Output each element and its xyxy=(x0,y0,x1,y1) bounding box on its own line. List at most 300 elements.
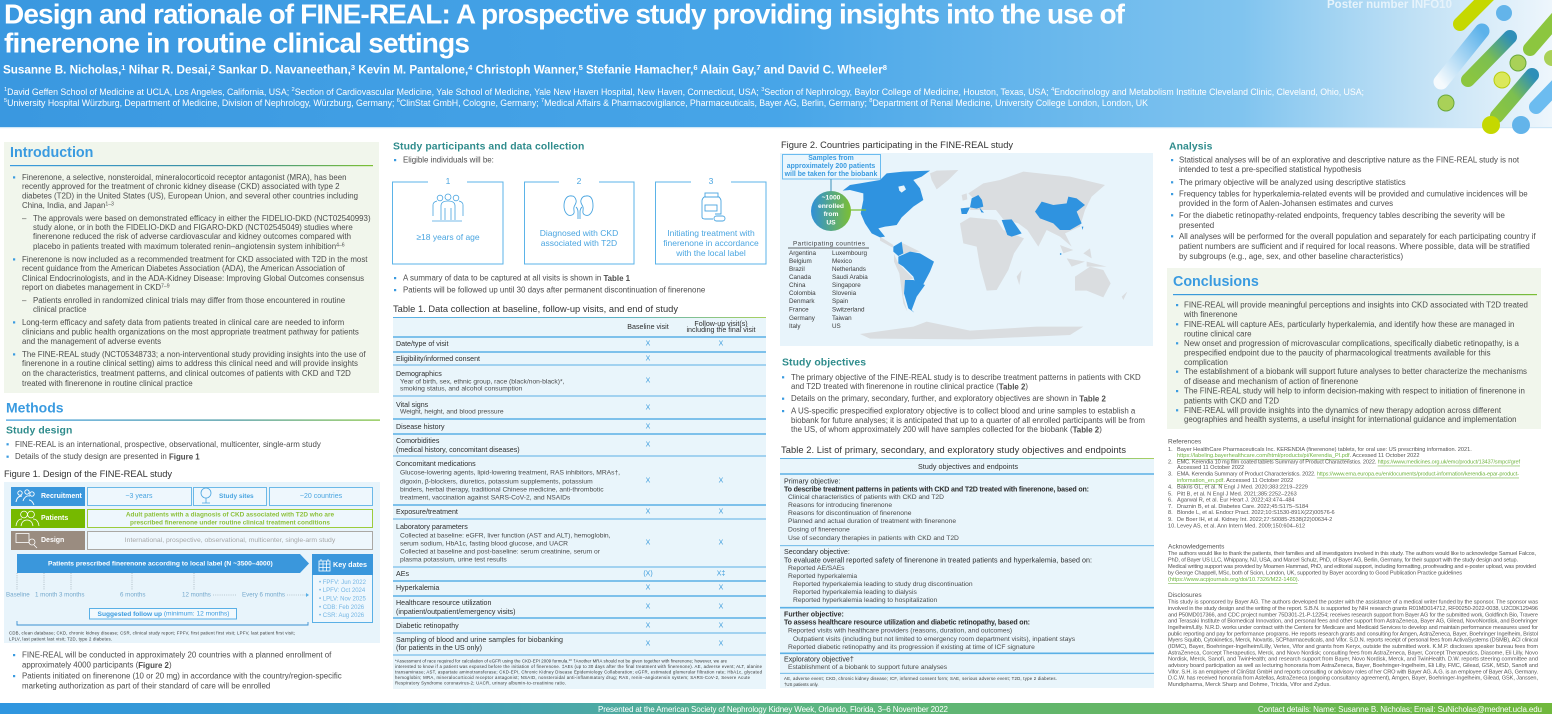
data collection bullets: A summary of data to be captured at all visits is shown in Table 1 xyxy=(403,274,631,282)
bullets below figure 1: FINE-REAL will be conducted in approximately 20 countries with a planned enrollment of xyxy=(22,650,332,660)
panel: introduction xyxy=(4,142,379,393)
table 1 header xyxy=(627,320,756,334)
eligibility box 1: age: ≥18 years of age xyxy=(416,232,480,242)
acknowledgements: The authors would like to thank the patients, their families and all investigators involved in this study. The authors would like to acknowledge Samuel Falcos, xyxy=(1168,551,1536,557)
authors: Susanne B. Nicholas,1 Nihar R. Desai,2 Sankar D. Navaneethan,3 Kevin M. Pantalone,4 Christoph Wanner,5 Stefanie Hamacher,6 Alain Gay,7 and David C. Wheeler8 xyxy=(3,63,887,76)
references: EMC. Kerendia 10 mg film coated tablets Summary of Product Characteristics. 2022. https://www.medicines.org.uk/emc/product/13437/smpc#gref xyxy=(1177,460,1520,466)
analysis bullets: For the diabetic retinopathy-related endpoints, frequency tables describing the severity will be xyxy=(1179,211,1506,220)
header decoration: capsules and circles xyxy=(1438,0,1552,134)
disclosures: and P50MD017366, and CDC project number 75D301-21-P-12254; receives research support from Bayer AG for the submitted work, Goldfinch Bio, Travere xyxy=(1168,612,1538,618)
eligibility box 2: CKD: Diagnosed with CKD xyxy=(540,228,618,238)
disclosures: D.C.W. has received honoraria from Astellas, AstraZeneca (ongoing consultancy agreement), Amgen, Bayer, Boehringer-Ingelheim, Gilead, GSK, Janssen, xyxy=(1168,676,1538,682)
secondary objective: Reported hyperkalemia leading to study drug discontinuation xyxy=(793,581,973,588)
analysis bullets xyxy=(1171,156,1536,261)
affiliations xyxy=(4,87,1364,108)
US enrollment circle xyxy=(811,191,866,231)
introduction text: recent guidance from the American Diabetes Association (ADA), the American Association of xyxy=(22,264,346,273)
eligibility box 1: age: 1 xyxy=(446,176,451,186)
secondary objective xyxy=(784,548,1092,604)
affiliations: 1David Geffen School of Medicine at UCLA, Los Angeles, California, USA; 2Section of Cardiovascular Medicine, Yale School of Medicine, Yale New Haven Hospital, New Haven, Connecticut, USA; 3Section of Nephrology, Baylor College of Medicine, Houston, Texas, USA; 4Endocrinology and Metabolism Institute Cleveland Clinic, Cleveland, Ohio, USA; xyxy=(4,87,1364,97)
study design bullets: FINE-REAL is an international, prospective, observational, multicenter, single-arm study xyxy=(15,440,321,449)
participating countries list: Denmark xyxy=(789,298,815,305)
table 1 footnote: Respiratory Syndrome coronavirus-2; UACR, urinary albumin-to-creatinine ratio. xyxy=(395,680,566,686)
study objectives bullets: biobank for future analyses; it is anticipated that up to a quarter of all enrolled participants will be from xyxy=(791,416,1145,425)
table 1 rows: X xyxy=(719,340,724,348)
introduction text: and the management of adverse events xyxy=(22,337,161,346)
US enrollment circle: US xyxy=(826,220,836,226)
table 1 rows: Eligibility/informed consent xyxy=(396,355,480,363)
references: 2. xyxy=(1168,460,1173,466)
participating countries list: Slovenia xyxy=(832,290,857,297)
conclusions text: patients with CKD and T2D xyxy=(1184,396,1279,406)
table 1 rows: binders, herbal therapy, traditional Chinese medicine, anti-thrombotic xyxy=(400,486,604,494)
footer: contact: Contact details: Name: Susanne B. Nicholas; Email: SuNicholas@mednet.ucla.edu xyxy=(1258,705,1542,714)
participating countries list: Colombia xyxy=(789,290,816,297)
primary objective xyxy=(784,477,1089,542)
conclusions text: complication xyxy=(1184,358,1228,367)
table 1 rows: treatment, vaccination against SARS-CoV-2, and NSAIDs xyxy=(400,494,571,502)
key dates box: • CDB: Feb 2026 xyxy=(319,605,365,611)
table 1 rows: X xyxy=(719,508,724,516)
timeline xyxy=(6,573,309,598)
analysis bullets: presented xyxy=(1179,221,1214,230)
introduction text: clinicians and public health organizations on the most appropriate treatment pathway for patients xyxy=(22,328,359,336)
arrow: patients prescribed finerenone xyxy=(17,554,309,573)
conclusions text: FINE-REAL will provide insights into the dynamics of new therapy adoption across different xyxy=(1184,406,1502,415)
conclusions text: of disease and mechanism of action of finerenone xyxy=(1184,377,1359,386)
disclosures: Disclosures xyxy=(1168,592,1202,599)
table 1 footnote: *Assessment of race required for calculation of eGFR using the CKD-EPI 2009 formula.10 †Another MRA should not be given together with finerenone; however, we are xyxy=(395,658,728,664)
primary objective: Dosing of finerenone xyxy=(788,526,850,534)
introduction text: The approvals were based on demonstrated efficacy in either the FIDELIO-DKD (NCT02540993) xyxy=(33,214,371,223)
secondary objective: Secondary objective: xyxy=(784,548,850,556)
exploratory objective: Establishment of a biobank to support future analyses xyxy=(788,664,948,671)
arrow: patients prescribed finerenone: Patients prescribed finerenone according to local label (N ~3500–4000) xyxy=(48,560,273,568)
eligibility box 3: treatment: Initiating treatment with xyxy=(667,228,755,238)
table 1 rows: Collected at baseline: eGFR, liver function (AST and ALT), hemoglobin, xyxy=(400,532,611,540)
references: 1. xyxy=(1168,447,1173,453)
references: 10. xyxy=(1168,524,1176,530)
timeline: 1 month xyxy=(35,592,58,598)
row: design xyxy=(11,531,372,550)
secondary objective: Reported AE/SAEs xyxy=(788,565,845,572)
table 1 rows: smoking status, and alcohol consumption xyxy=(400,386,523,392)
references xyxy=(1168,438,1520,530)
references: References xyxy=(1168,438,1202,446)
table 2 footnote: †US patients only. xyxy=(784,682,819,687)
row: recruitment xyxy=(11,487,372,506)
table 1 rows: X xyxy=(646,640,651,648)
introduction text: Finerenone is now included as a recommended treatment for CKD associated with T2D in the most xyxy=(22,255,368,264)
heading: analysis: Analysis xyxy=(1169,142,1213,152)
conclusions text: The FINE-REAL study will help to inform decision-making with respect to initiation of finerenone in xyxy=(1184,386,1525,396)
table 1 rows: Collected at baseline and post-baseline: serum creatinine, serum or xyxy=(400,548,601,556)
study objectives bullets: the US, of whom approximately 200 will have samples collected for the biobank (Table 2) xyxy=(791,425,1102,434)
table 1 rows: (medical history, concomitant diseases) xyxy=(396,446,520,454)
table 1 rows: (X) xyxy=(643,570,653,578)
references: De Boer IH, et al. Kidney Int. 2022;27:S0085-2538(22)00634-2 xyxy=(1177,517,1332,523)
eligibility box 3: treatment xyxy=(656,176,766,264)
table 1 header: including the final visit xyxy=(686,326,756,334)
analysis bullets: by subgroups (e.g., age, sex, and other baseline characteristics) xyxy=(1179,252,1404,261)
participating countries list: China xyxy=(789,282,806,289)
row: recruitment: ~20 countries xyxy=(300,493,343,500)
study objectives bullets: A US-specific prespecified exploratory objective is to collect blood and urine samples to establish a xyxy=(791,406,1136,416)
eligibility box 2: CKD xyxy=(524,176,634,264)
conclusions text: with finerenone xyxy=(1183,310,1238,319)
further objective: Reported visits with healthcare providers (reasons, duration, and outcomes) xyxy=(788,628,1012,634)
heading: methods: Methods xyxy=(6,400,64,416)
map landmasses xyxy=(843,170,1127,339)
figure 1 abbreviations: CDB, clean database; CKD, chronic kidney disease; CSR, clinical study report; FPFV, first patient first visit; LPFV, last patient first visit; xyxy=(9,630,295,636)
participating countries list: Spain xyxy=(832,298,849,305)
heading: study participants and data collection: Study participants and data collection xyxy=(393,142,584,152)
introduction text: The FINE-REAL study (NCT05348733; a non-interventional study providing insights into the use of xyxy=(22,350,366,359)
participating countries list: Switzerland xyxy=(832,306,865,314)
eligibility box 3: treatment: with the local label xyxy=(675,248,746,258)
introduction text: on the characteristics, treatment patterns, and clinical outcomes of patients with CKD and T2D xyxy=(22,369,351,378)
footer bar xyxy=(0,703,1552,714)
US enrollment circle: enrolled xyxy=(818,203,844,210)
introduction text: – xyxy=(22,296,27,305)
disclosures: advisory board participation as well as lecturing honoraria from AstraZeneca, Bayer, Boehringer-Ingelheim, Eli Lilly, FMC, Gilead, GSK, MSD, Sanofi and xyxy=(1168,663,1538,669)
data collection bullets: Patients will be followed up until 30 days after permanent discontinuation of finerenone xyxy=(403,286,706,294)
participating countries list: Canada xyxy=(789,274,812,281)
participating countries list: Participating countries xyxy=(793,240,865,248)
references: EMA. Kerendia Summary of Product Characteristics. 2022. https://www.ema.europa.eu/en/documents/product-information/kerendia-epar-product- xyxy=(1177,472,1519,478)
references: Levey AS, et al. Ann Intern Med. 2009;150:604–612 xyxy=(1177,524,1305,530)
heading: introduction: Introduction xyxy=(10,145,93,161)
icon: recruitment people xyxy=(16,490,34,505)
figure 1 caption: Figure 1. Design of the FINE-REAL study xyxy=(4,469,172,479)
icon: patients outline xyxy=(16,511,39,526)
table 1 header: Follow-up visit(s) xyxy=(694,320,748,328)
further objective xyxy=(784,610,1076,651)
bullets below figure 1 xyxy=(13,650,342,690)
table 1 footnote: interested to know if a patient was exposed before the initiation of finerenone. ‡AEs (up to 30 days after the final treatment with finerenone). AE, adverse event; ALT, alanine xyxy=(395,664,763,669)
table 1 rows: X xyxy=(646,622,651,630)
key dates box: • FPFV: Jun 2022 xyxy=(319,580,367,586)
eligibility box 2: CKD: associated with T2D xyxy=(541,238,617,248)
references: 5. xyxy=(1168,492,1173,498)
conclusions text: prespecified endpoint due to the paucity of pharmacological treatments available for this xyxy=(1184,348,1491,358)
acknowledgements: Acknowledgements xyxy=(1168,544,1225,550)
table 1 rows: (inpatient/outpatient/emergency visits) xyxy=(396,608,515,616)
table 1 rows: plasma potassium, urine test results xyxy=(400,556,507,564)
further objective: Outpatient visits (including but not limited to emergency room department visits), inpatient stays xyxy=(793,636,1076,643)
table 1 rows: Demographics xyxy=(396,370,442,378)
participating countries list: Luxembourg xyxy=(832,250,868,257)
secondary objective: To evaluate overall reported safety of finerenone in treated patients and hyperkalemia, based on: xyxy=(784,556,1092,564)
table 1 caption: Table 1. Data collection at baseline, follow-up visits, and end of study xyxy=(393,304,678,314)
table 1 rows: X xyxy=(646,404,651,412)
conclusions text: geographies and health systems, a useful insight for international guidance and implementation xyxy=(1184,415,1516,424)
conclusions text: FINE-REAL will provide meaningful perceptions and insights into CKD associated with T2D treated xyxy=(1184,300,1528,310)
eligibility box 1: age xyxy=(392,176,503,264)
icon: design monitor xyxy=(16,534,37,548)
key dates box: • LPFV: Oct 2024 xyxy=(319,588,366,594)
table 1 rows: AEs xyxy=(396,570,409,578)
timeline: 12 months xyxy=(182,592,211,598)
title: finerenone in routine clinical settings xyxy=(4,28,470,58)
table 1 rows: Glucose-lowering agents, lipid-lowering treatment, RAS inhibitors, MRAs†, xyxy=(400,470,620,476)
analysis bullets: patient numbers are sufficient and if required for local reasons. Where possible, data will be stratified xyxy=(1179,242,1530,251)
primary objective: Primary objective: xyxy=(784,477,840,485)
participating countries list: Germany xyxy=(789,315,816,322)
table 1 footnote xyxy=(395,658,763,686)
introduction text: finerenone reduced the risk of adverse cardiovascular and kidney outcomes compared with xyxy=(33,232,351,241)
figure 1: study design diagram xyxy=(4,482,380,643)
conclusions text: The establishment of a biobank will support future analyses to better characterize the mechanisms xyxy=(1184,367,1527,376)
table 1 rows: X‡ xyxy=(717,570,725,578)
table 1 rows: X xyxy=(719,478,724,484)
table 1 rows: Healthcare resource utilization xyxy=(396,599,491,607)
table 2 footnote: AE, adverse event; CKD, chronic kidney disease; ICF, informed consent form; SAE, serious adverse event; T2D, type 2 diabetes. xyxy=(784,676,1057,681)
analysis bullets: provided in the form of Aalen-Johansen estimates and curves xyxy=(1179,199,1393,208)
participating countries list xyxy=(788,240,869,330)
introduction text: study alone, or in both the FIDELIO-DKD and FIGARO-DKD (NCT02545049) studies where xyxy=(33,223,353,232)
timeline: Every 6 months xyxy=(242,592,285,598)
conclusions text: routine clinical care xyxy=(1184,330,1252,338)
timeline: Baseline xyxy=(6,592,30,598)
disclosures xyxy=(1168,592,1538,688)
disclosures: AstraZeneca, Corcept Therapeutics, Merck, and Novo Nordisk; consulting fees from AstraZeneca, Bayer, Corcept Therapeutics, Diasome, Eli Lilly, Novo xyxy=(1168,650,1538,656)
disclosures: Nordisk, Merck, Sanofi, and TwinHealth; and research support from Bayer, Novo Nordisk, Merck, and TwinHealth. D.W. reports steering committee and xyxy=(1168,657,1538,663)
introduction text: placebo in patients treated with maximum tolerated renin–angiotensin system inhibition4–6 xyxy=(33,242,345,251)
affiliations: 5University Hospital Würzburg, Department of Medicine, Division of Nephrology, Würzburg, Germany; 6ClinStat GmbH, Cologne, Germany; 7Medical Affairs & Pharmacovigilance, Pharmaceuticals, Bayer AG, Berlin, Germany; 8Department of Renal Medicine, University College London, London, UK xyxy=(4,98,1148,108)
participating countries list: Taiwan xyxy=(832,315,852,322)
primary objective: Clinical characteristics of patients with CKD and T2D xyxy=(788,494,944,501)
heading: study objectives: Study objectives xyxy=(782,358,866,368)
title xyxy=(4,0,1126,58)
table 1 rows: Date/type of visit xyxy=(396,340,448,348)
analysis bullets: Frequency tables for hyperkalemia-related events will be provided and cumulative incidences will be xyxy=(1179,190,1528,198)
references: Pitt B, et al. N Engl J Med. 2021;385:2252–2263 xyxy=(1177,492,1297,498)
table 1 rows: X xyxy=(646,356,651,362)
disclosures: Vifor. S.H. is an employee of ClinStat GmbH and reports consulting or advisory roles of her CRO with Bayer AG. A.G. is an employee of Bayer AG, Germany. xyxy=(1168,669,1538,675)
primary objective: To describe treatment patterns in patients with CKD and T2D treated with finerenone, based on: xyxy=(784,485,1089,493)
table 1 footnote: transaminase; AST, aspartate aminotransferase; CKD-EPI, Chronic Kidney Disease Epidemiology Collaboration; eGFR, estimated glomerular filtration rate; HbA1c, glycated xyxy=(395,670,763,674)
acknowledgements: by George Chappell, MSc, both of Scion, London, UK, supported by Bayer according to Good Publication Practice guidelines xyxy=(1168,571,1462,577)
participating countries list: Argentina xyxy=(789,250,816,257)
table 1 rows: X xyxy=(646,424,651,430)
further objective: Further objective: xyxy=(784,610,844,618)
further objective: Reported diabetic retinopathy and its progression if existing at time of ICF signature xyxy=(788,644,1035,651)
participating countries list: Netherlands xyxy=(832,266,866,273)
table 2: objectives and endpoints xyxy=(780,458,1154,688)
acknowledgements: (https://www.acpjournals.org/doi/10.7326/M22-1460). xyxy=(1168,577,1300,583)
references: Accessed 11 October 2022 xyxy=(1177,465,1244,471)
table 1 rows: X xyxy=(646,378,651,384)
further objective: To assess healthcare resource utilization and diabetic retinopathy, based on: xyxy=(784,619,1030,627)
table 1 rows: serum sodium, HbA1c, fasting blood glucose, and UACR xyxy=(400,540,568,548)
introduction text: diabetes (T2D) in the United States (US), European Union, and several other countries including xyxy=(22,192,358,200)
table 1 rows: X xyxy=(646,584,651,592)
row: recruitment: Recruitment xyxy=(41,493,83,500)
study design bullets xyxy=(6,440,321,461)
table 1 rows: digoxin, β-blockers, diuretics, potassium supplements, potassium xyxy=(400,478,593,486)
key dates box: • LPLV: Nov 2025 xyxy=(319,596,366,602)
disclosures: involved in the study design and the writing of the report. S.B.N. is supported by NIH research grants R01MD014712, RF00250-2022-0038, U2CDK129496 xyxy=(1168,606,1538,612)
table 1 rows xyxy=(393,337,766,655)
US enrollment circle: from xyxy=(824,211,838,218)
icon: globe xyxy=(201,488,211,503)
disclosures: Ingelheim/Lilly. N.R.D. works under contract with the Centers for Medicare and Medicaid Services to develop and maintain performance measures used for xyxy=(1168,625,1538,631)
callout: biobank samples: will be taken for the biobank xyxy=(784,171,877,178)
bullets below figure 1: Patients initiated on finerenone (10 or 20 mg) in accordance with the country/region-specific xyxy=(22,672,342,680)
introduction text: clinical practice xyxy=(33,305,87,314)
table 1 rows: Sampling of blood and urine samples for biobanking xyxy=(396,636,563,644)
conclusions text xyxy=(1176,300,1528,424)
table 1 footnote: hemoglobin; MRA, mineralocorticoid receptor antagonist; NSAID, nonsteroidal anti-inflammatory drug; RAS, renin–angiotensin system; SARS-CoV-2, Severe Acute xyxy=(395,675,751,680)
table 2 header: Study objectives and endpoints xyxy=(918,463,1018,471)
acknowledgements xyxy=(1168,544,1536,583)
participating countries list: Italy xyxy=(789,323,801,330)
introduction text xyxy=(13,173,371,388)
references: information_en.pdf. Accessed 11 October 2022 xyxy=(1177,478,1293,484)
header banner xyxy=(0,0,1552,128)
disclosures: (IDMC), Bayer, Boehringer-Ingelheim/Lilly, Vertex, Vifor and grants from Keryx, outside the submitted work. K.M.P. discloses speaker bureau fees from xyxy=(1168,644,1538,650)
table 1 rows: Vital signs xyxy=(396,401,429,409)
table 1 rows: X xyxy=(719,604,724,610)
icon: calendar xyxy=(319,559,330,571)
bullets below figure 1: approximately 4000 participants (Figure 2) xyxy=(22,660,172,670)
table 1 rows: X xyxy=(646,540,651,546)
table 1 rows: X xyxy=(719,540,724,546)
table 1 header: Baseline visit xyxy=(627,323,669,331)
table 1 rows: Exposure/treatment xyxy=(396,508,458,516)
analysis bullets: The primary objective will be analyzed using descriptive statistics xyxy=(1179,178,1406,187)
references: 3. xyxy=(1168,472,1173,478)
disclosures: public reporting and pay for performance programs. He reports research grants and consulting for Amgen, AstraZeneca, Bayer, Boehringer Ingelheim, Bristol xyxy=(1168,631,1538,637)
table 1 rows: X xyxy=(646,478,651,484)
table 1 rows: Hyperkalemia xyxy=(396,584,439,592)
table 1 rows: (for patients in the US only) xyxy=(396,644,482,652)
conclusions text: New onset and progression of microvascular complications, specifically diabetic retinopathy, is a xyxy=(1184,339,1520,348)
participating countries list: Belgium xyxy=(789,258,812,265)
acknowledgements: Medical writing support was provided by Moamen Hammad, PhD, and editorial support, including formatting, proofreading and e-poster upload, was provided xyxy=(1168,564,1536,570)
row: recruitment: Study sites xyxy=(219,493,254,500)
acknowledgements: PhD, of Bayer US LLC, Whippany, NJ, USA, and Marcel Schulz, PhD, of Bayer AG, Berlin, Germany, for their support with the study design and setup. xyxy=(1168,558,1518,564)
row: design: Design xyxy=(41,537,64,544)
figure 2: world map xyxy=(780,153,1153,346)
secondary objective: Reported hyperkalemia leading to dialysis xyxy=(793,589,917,596)
study objectives bullets: Details on the primary, secondary, further, and exploratory objectives are shown in Table 2 xyxy=(791,394,1107,403)
references: Draznin B, et al. Diabetes Care. 2022;45:S175–S184 xyxy=(1177,504,1308,510)
references: Bakris GL, et al. N Engl J Med. 2020;383:2219–2229 xyxy=(1177,485,1308,491)
eligibility bullet: Eligible individuals will be: xyxy=(403,156,494,164)
key dates box: • CSR: Aug 2026 xyxy=(319,613,365,619)
references: 4. xyxy=(1168,485,1173,491)
row: patients: Patients xyxy=(41,515,68,522)
introduction text: Clinical Endocrinologists, and in the ADA-Kidney Disease: Improving Global Outcomes consensus xyxy=(22,274,364,283)
row: patients: prescribed finerenone under routine clinical treatment conditions xyxy=(130,520,330,526)
references: 6. xyxy=(1168,498,1173,504)
row: design: International, prospective, observational, multicenter, single-arm study xyxy=(125,537,336,544)
table 1 rows: Concomitant medications xyxy=(396,460,476,468)
table 1 rows: Comorbidities xyxy=(396,437,440,445)
introduction text: treated with finerenone in routine clinical practice xyxy=(22,379,193,388)
references: Agarwal R, et al. Eur Heart J. 2022;43:474–484 xyxy=(1177,498,1295,504)
participating countries list: Brazil xyxy=(789,266,805,273)
introduction text: – xyxy=(22,214,27,223)
callout: biobank samples xyxy=(782,154,880,191)
disclosures: This study is sponsored by Bayer AG. The authors developed the poster with the assistance of a medical writer funded by the sponsor. The sponsor was xyxy=(1168,600,1538,606)
primary objective: Use of secondary therapies in patients with CKD and T2D xyxy=(788,535,959,542)
icon: kidneys xyxy=(564,196,593,219)
study objectives bullets xyxy=(782,373,1145,434)
timeline: 6 months xyxy=(120,592,145,598)
table 1 rows: Year of birth, sex, ethnic group, race (black/non-black)*, xyxy=(400,378,565,386)
row: patients: Adult patients with a diagnosis of CKD associated with T2D who are xyxy=(126,512,334,518)
study objectives bullets: The primary objective of the FINE-REAL study is to describe treatment patterns in patients with CKD xyxy=(791,373,1141,382)
timeline: 3 months xyxy=(59,592,84,598)
table 2 footnote xyxy=(784,676,1057,687)
references: 9. xyxy=(1168,517,1173,523)
introduction text: China, India, and Japan1–3 xyxy=(22,201,114,210)
exploratory objective: Exploratory objective† xyxy=(784,656,854,664)
heading: conclusions: Conclusions xyxy=(1173,274,1259,290)
table 1 rows: X xyxy=(719,584,724,592)
table 1 rows: X xyxy=(646,340,651,348)
disclosures: Myers Squibb, Cytokinetics, Merck, Novartis, SCPharmaceuticals, and Vifor. S.D.N. reports receipt of personal fees from ActivaSystems (DSMB), ACI clinical xyxy=(1168,638,1538,644)
introduction text: finerenone in a routine clinical setting) aims to address this clinical need and will provide insights xyxy=(22,359,358,368)
analysis bullets: intended to test a pre-specified statistical hypothesis xyxy=(1179,165,1362,174)
table 1 rows: Disease history xyxy=(396,423,445,431)
icon: group of people xyxy=(432,194,463,221)
table 1 rows: X xyxy=(646,442,651,448)
table 1 rows: Weight, height, and blood pressure xyxy=(400,408,504,416)
panel: conclusions xyxy=(1167,268,1541,429)
figure 2 caption: Figure 2. Countries participating in the FINE-REAL study xyxy=(781,140,1013,150)
participating countries list: France xyxy=(789,306,809,314)
callout: biobank samples: Samples from xyxy=(808,155,854,162)
participating countries list: Mexico xyxy=(832,258,852,265)
table 1 rows: Diabetic retinopathy xyxy=(396,622,459,630)
figure 1 abbreviations: LPLV, last patient last visit; T2D, type 2 diabetes. xyxy=(9,636,112,642)
analysis bullets: All analyses will be performed for the overall population and separately for each participating country if xyxy=(1179,232,1536,241)
key dates box xyxy=(312,554,373,622)
footer: meeting: Presented at the American Society of Nephrology Kidney Week, Orlando, Florida, 3–6 November 2022 xyxy=(598,705,949,714)
secondary objective: Reported hyperkalemia xyxy=(788,573,857,580)
suggested follow up box: Suggested follow up (minimum: 12 months) xyxy=(98,610,229,617)
heading: study design: Study design xyxy=(6,426,72,436)
primary objective: Planned and actual duration of treatment with finerenone xyxy=(788,518,956,525)
row: patients xyxy=(11,509,372,528)
references: Bayer HealthCare Pharmaceuticals Inc. KERENDIA (finerenone) tablets, for oral use: US prescribing information. 2021. xyxy=(1177,447,1472,453)
introduction text: recently approved for the treatment of chronic kidney disease (CKD) associated with type 2 xyxy=(22,182,340,191)
introduction text: Long-term efficacy and safety data from patients treated in clinical care are needed to inform xyxy=(22,318,345,327)
study objectives bullets: and T2D treated with finerenone in routine clinical practice (Table 2) xyxy=(791,382,1028,391)
bullets below figure 1: marketing authorization as part of their standard of care will be enrolled xyxy=(22,682,270,690)
eligibility box 2: CKD: 2 xyxy=(577,176,582,186)
table 1 rows: Laboratory parameters xyxy=(396,523,468,531)
secondary objective: Reported hyperkalemia leading to hospitalization xyxy=(793,597,938,604)
disclosures: and Terasaki Institute of Biomedical Innovation, and personal fees and other support from AstraZeneca, Bayer AG, Gilead, NovoNordisk, and Boehringer xyxy=(1168,619,1538,625)
disclosures: Mundipharma, Merck Sharp and Dohme, Tricida, Vifor and Zydus. xyxy=(1168,682,1331,688)
study design bullets: Details of the study design are presented in Figure 1 xyxy=(15,452,200,461)
figure 1 abbreviations xyxy=(9,630,295,642)
table 1 rows: X xyxy=(719,622,724,630)
participating countries list: US xyxy=(832,323,841,330)
row: recruitment: ~3 years xyxy=(125,493,153,500)
table 1: data collection xyxy=(393,317,766,689)
US enrollment circle: ~1000 xyxy=(822,194,841,202)
introduction text: Patients enrolled in randomized clinical trials may differ from those encountered in routine xyxy=(33,296,346,305)
eligibility box 3: treatment: finerenone in accordance xyxy=(663,238,759,248)
introduction text: Finerenone, a selective, nonsteroidal, mineralocorticoid receptor antagonist (MRA), has been xyxy=(22,173,347,182)
table 2 caption: Table 2. List of primary, secondary, and exploratory study objectives and endpoints xyxy=(781,445,1126,455)
